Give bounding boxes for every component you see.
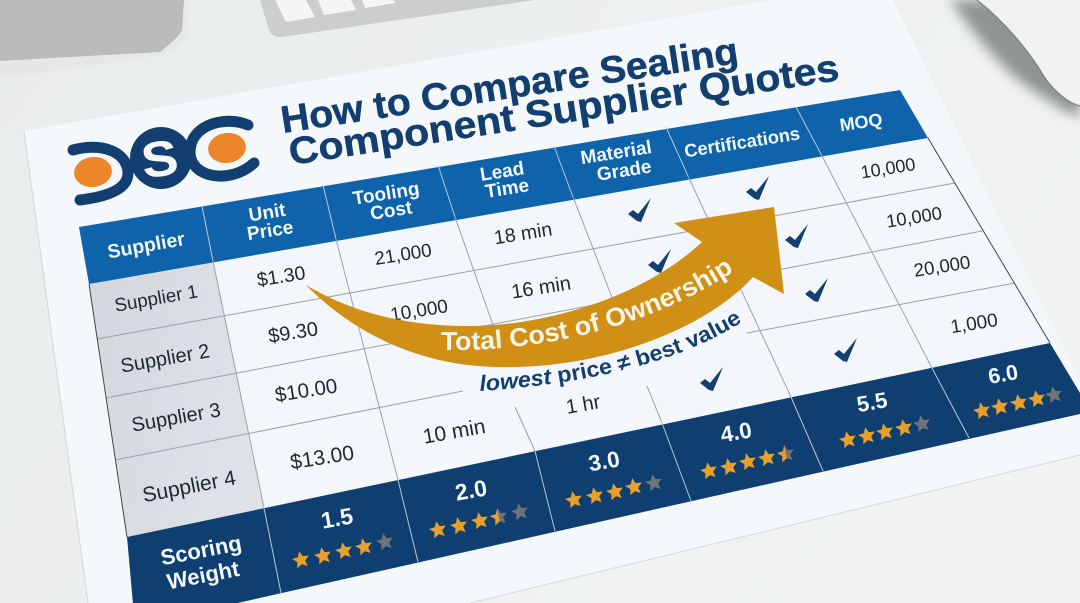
- logo: right orange dot: [206, 131, 248, 165]
- logo: C arc: [190, 121, 254, 176]
- supplier column shading: [89, 261, 264, 537]
- header labels: Lead: [479, 158, 526, 186]
- unit price values: $13.00: [289, 441, 356, 474]
- header labels: MOQ: [838, 109, 884, 135]
- supplier names: Supplier 4: [141, 466, 238, 507]
- unit price values: $1.30: [255, 262, 307, 291]
- score 4.0 with stars: [699, 417, 796, 480]
- scoring weight label: Scoring: [158, 530, 244, 570]
- header labels: Grade: [595, 156, 653, 186]
- score 6.0 with stars: 6.0: [986, 360, 1020, 389]
- comparison table: [79, 90, 1080, 603]
- score 6.0 with stars: [972, 360, 1064, 420]
- score 3.0 with stars: 3.0: [586, 446, 622, 476]
- supplier names: Supplier 3: [130, 399, 222, 437]
- arrow: total cost of ownership: [306, 207, 784, 368]
- check marks: [628, 176, 857, 391]
- scoring weight label: [158, 530, 244, 594]
- header labels: Price: [246, 217, 295, 245]
- logo: reversed D arc: [73, 147, 128, 200]
- MOQ values: 10,000: [885, 202, 943, 232]
- header labels: Cost: [369, 197, 414, 225]
- score 5.5 with stars: [838, 387, 932, 449]
- lead time values: 10 min: [421, 415, 487, 449]
- score 5.5 with stars: 5.5: [855, 387, 889, 417]
- scoring band: [127, 343, 1080, 603]
- title line 2: Component Supplier Quotes: [286, 47, 842, 174]
- title: [278, 30, 842, 174]
- supplier names: Supplier 2: [119, 340, 211, 378]
- score 4.0 with stars: 4.0: [718, 417, 754, 447]
- supplier names: [113, 280, 238, 507]
- MOQ values: [859, 154, 999, 338]
- supplier names: Supplier 1: [113, 280, 199, 316]
- unit price values: [255, 262, 356, 474]
- tooling cost values: 21,000: [373, 239, 433, 269]
- logo: left orange dot: [72, 155, 114, 189]
- keyboard corner: [260, 0, 535, 37]
- scoring weight label: Weight: [165, 556, 242, 594]
- header band: [79, 90, 928, 284]
- mouse with shadow: [950, 0, 1080, 117]
- lead time values: 16 min: [510, 272, 573, 304]
- header labels: Certifications: [683, 122, 801, 161]
- table grid lines: [89, 138, 1050, 537]
- title line 1: How to Compare Sealing: [278, 30, 741, 142]
- unit price values: $10.00: [273, 374, 339, 407]
- score 3.0 with stars: [564, 446, 664, 509]
- header labels: Material: [579, 137, 653, 169]
- logo: white S: S: [138, 129, 182, 190]
- score 2.0 with stars: [428, 474, 530, 539]
- lead time values: 1 hr: [564, 391, 602, 419]
- MOQ values: 20,000: [912, 251, 972, 281]
- MOQ values: 1,000: [949, 310, 999, 338]
- header labels: Time: [484, 175, 531, 203]
- lead time values: [421, 218, 602, 449]
- unit price values: $9.30: [267, 318, 320, 348]
- header labels: [106, 109, 884, 263]
- arrow label: Total Cost of Ownership: [441, 262, 732, 350]
- logo: centre disc: [130, 127, 192, 189]
- header labels: Tooling: [351, 179, 421, 210]
- score 1.5 with stars: [291, 502, 395, 569]
- tooling cost values: 10,000: [389, 296, 450, 326]
- header labels: Unit: [247, 200, 288, 226]
- score 2.0 with stars: 2.0: [453, 474, 489, 506]
- MOQ values: 10,000: [859, 154, 917, 182]
- caption: lowest price is not best value: lowest price ≠ best value: [480, 314, 740, 391]
- header and score dividers: [202, 107, 969, 593]
- header labels: Supplier: [106, 228, 187, 263]
- laptop corner: [0, 0, 188, 79]
- score 1.5 with stars: 1.5: [319, 502, 355, 534]
- table body: [89, 138, 1050, 537]
- lead time values: 18 min: [493, 218, 554, 249]
- logo: [72, 121, 254, 200]
- tooling cost values: [373, 239, 450, 326]
